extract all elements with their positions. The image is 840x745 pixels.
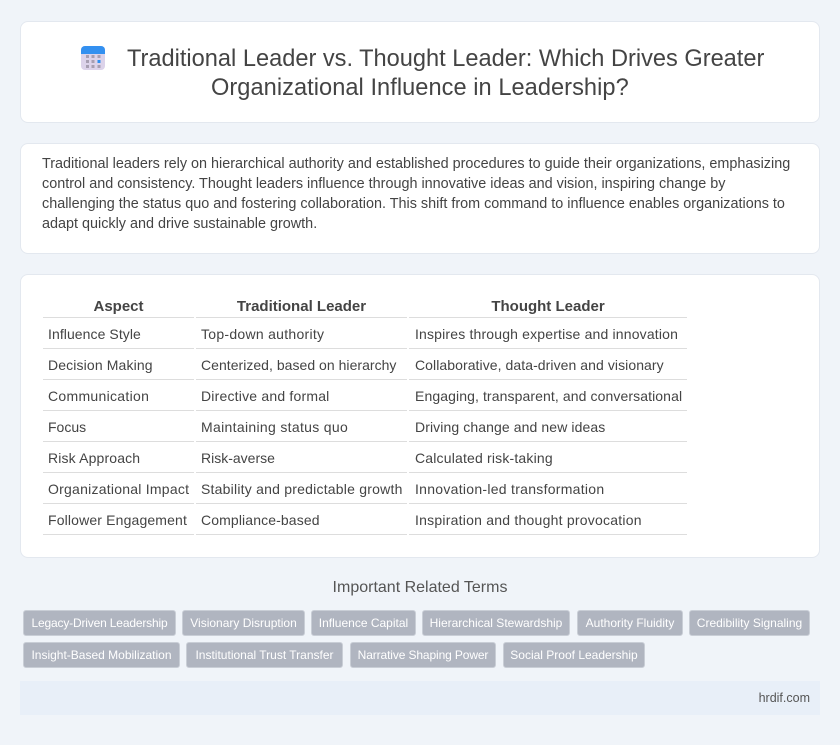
comparison table: Directive and formal (201, 388, 330, 404)
comparison table: Maintaining status quo (201, 419, 348, 435)
comparison table: Collaborative, data-driven and visionary (415, 357, 664, 373)
intro text: adapt quickly and drive sustainable growth. (42, 216, 317, 232)
comparison table: Aspect (93, 298, 144, 315)
related term tags: Insight-Based Mobilization (31, 648, 172, 662)
comparison table: Compliance-based (201, 512, 320, 528)
comparison table: Focus (48, 419, 86, 435)
comparison table: Inspiration and thought provocation (415, 512, 642, 528)
intro text: challenging the status quo and fostering collaboration. This shift from command to influence enables organizations to (42, 196, 785, 212)
comparison table: Top-down authority (201, 326, 324, 342)
related term tags: Influence Capital (319, 616, 408, 630)
icon: calendar (81, 46, 105, 70)
footer source: hrdif.com (759, 691, 810, 705)
related term tags (23, 610, 810, 668)
comparison table (43, 298, 687, 535)
intro text: Traditional leaders rely on hierarchical authority and established procedures to guide their organizations, emphasizing (42, 156, 790, 172)
related term tags: Legacy-Driven Leadership (31, 616, 168, 630)
heading: related terms: Important Related Terms (333, 579, 507, 596)
panel: title header (20, 21, 820, 123)
related term tags: Authority Fluidity (586, 616, 674, 630)
comparison table: Inspires through expertise and innovation (415, 326, 678, 342)
comparison table: Decision Making (48, 357, 153, 373)
comparison table: Risk Approach (48, 450, 140, 466)
comparison table: Driving change and new ideas (415, 419, 605, 435)
comparison table: Thought Leader (491, 298, 605, 315)
related term tags: Visionary Disruption (190, 616, 297, 630)
comparison table: Traditional Leader (237, 298, 366, 315)
title: Traditional Leader vs. Thought Leader: Which Drives Greater (127, 46, 764, 72)
related term tags: Social Proof Leadership (510, 648, 638, 662)
comparison table: Organizational Impact (48, 481, 189, 497)
related term tags: Institutional Trust Transfer (195, 648, 334, 662)
related term tags: Narrative Shaping Power (358, 648, 488, 662)
related term tags: Hierarchical Stewardship (430, 616, 562, 630)
panel: comparison table (20, 274, 820, 558)
comparison table: Engaging, transparent, and conversational (415, 388, 682, 404)
comparison table: Innovation-led transformation (415, 481, 604, 497)
comparison table: Centerized, based on hierarchy (201, 357, 396, 373)
title (127, 46, 764, 101)
related term tags: Credibility Signaling (697, 616, 802, 630)
intro text: control and consistency. Thought leaders influence through innovative ideas and vision, inspiring change by (42, 176, 725, 192)
comparison table: Influence Style (48, 326, 141, 342)
footer bar (20, 681, 820, 715)
comparison table: Follower Engagement (48, 512, 187, 528)
comparison table: Risk-averse (201, 450, 275, 466)
comparison table: Stability and predictable growth (201, 481, 403, 497)
comparison table: Calculated risk-taking (415, 450, 553, 466)
intro text (42, 156, 790, 232)
title: Organizational Influence in Leadership? (211, 75, 629, 101)
comparison table: Communication (48, 388, 149, 404)
panel: introduction (20, 143, 820, 254)
